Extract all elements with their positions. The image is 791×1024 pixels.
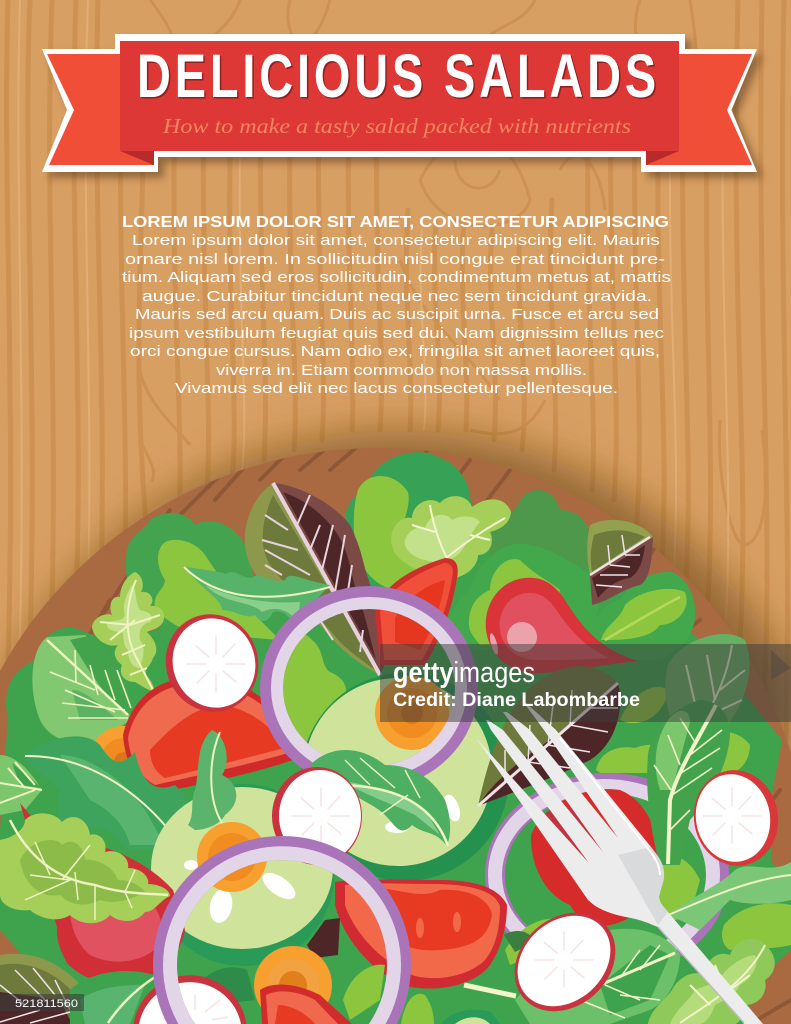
body copy bbox=[122, 214, 671, 397]
purple leaf: bottom left bbox=[0, 954, 90, 1024]
lettuce: small light leaf inside ring bbox=[660, 856, 700, 925]
cucumber: center bbox=[301, 673, 509, 881]
radish slice: right bbox=[686, 763, 786, 873]
ribbon shadow bbox=[48, 40, 763, 178]
lettuce: bottom center bbox=[401, 994, 500, 1024]
lettuce: left edge leaf bbox=[0, 755, 42, 815]
arugula: bottom left bbox=[70, 971, 155, 1024]
lettuce: frilly top bbox=[391, 496, 511, 578]
lettuce: right tall leaf bbox=[647, 700, 730, 865]
tomato: under fork bbox=[531, 789, 657, 926]
watermark credit: Credit: Diane Labombarbe bbox=[393, 690, 640, 711]
arugula: large lower left bbox=[23, 736, 192, 862]
watermark band bbox=[380, 644, 791, 722]
body paragraph: tium. Aliquam sed eros sollicitudin, condimentum metus at, mattis bbox=[122, 270, 671, 286]
tomato: bottom bbox=[260, 985, 352, 1024]
ribbon tails bbox=[47, 54, 752, 165]
lettuce: light lobes right bbox=[596, 687, 750, 773]
lettuce: top center bbox=[345, 452, 473, 600]
radish slice: lower right bbox=[495, 892, 635, 1024]
arugula: small upright bbox=[188, 730, 236, 830]
oak leaf: lower left bbox=[0, 813, 170, 923]
tomato: lower left bbox=[20, 803, 185, 985]
body paragraph: ipsum vestibulum feugiat quis sed dui. Nam dignissim tellus nec bbox=[129, 326, 664, 342]
purple leaf: top bbox=[245, 483, 387, 675]
tomato: top center bbox=[375, 558, 458, 665]
title ribbon bbox=[42, 34, 763, 178]
watermark logo text: gettyimages bbox=[393, 657, 535, 689]
ribbon white outline bbox=[42, 34, 757, 172]
body paragraph: orci congue cursus. Nam odio ex, fringilla sit amet laoreet quis, bbox=[130, 344, 660, 360]
arugula: on cucumber bbox=[310, 750, 450, 846]
body paragraph bbox=[122, 233, 671, 397]
onion ring: lower right bbox=[495, 783, 719, 967]
cucumber: lower left bbox=[151, 784, 334, 966]
lettuce: back left bbox=[126, 513, 280, 650]
beet wedge bbox=[486, 578, 638, 673]
salad bbox=[0, 452, 791, 1024]
image id tag bbox=[0, 994, 84, 1011]
lettuce: right bbox=[590, 572, 695, 660]
radish slice: bottom left bbox=[134, 975, 246, 1024]
tomato: left bbox=[123, 680, 306, 793]
onion ring: top bbox=[272, 598, 466, 778]
lettuce: bottom wide leaf bbox=[464, 919, 680, 1024]
subtitle: How to make a tasty salad packed with nutrients bbox=[162, 114, 631, 138]
radish slice: center bbox=[272, 767, 362, 865]
lettuce: light lobe inside ring bbox=[274, 634, 346, 760]
lettuce: bottom right frilly bbox=[648, 938, 775, 1024]
ribbon main band bbox=[120, 41, 679, 151]
lettuce base layer bbox=[0, 500, 791, 1024]
body paragraph: augue. Curabitur tincidunt neque nec sem tincidunt gravida. bbox=[142, 289, 652, 305]
fork bbox=[476, 703, 763, 1024]
body paragraph: ornare nisl lorem. In sollicitudin nisl congue erat tincidunt pre- bbox=[125, 252, 665, 268]
ribbon folds bbox=[120, 151, 679, 165]
arugula: right lower bbox=[668, 862, 791, 950]
lettuce: center right bbox=[447, 544, 598, 650]
tomato: wedge bottom center bbox=[335, 880, 507, 989]
purple leaf: center bbox=[478, 666, 620, 806]
onion ring: bottom left bbox=[153, 836, 411, 1024]
body paragraph: Vivamus sed elit nec lacus consectetur pellentesque. bbox=[175, 381, 618, 397]
lettuce: big left leaf bbox=[6, 627, 135, 758]
wooden plate bbox=[0, 440, 791, 1024]
oak leaf bbox=[92, 572, 164, 692]
arugula: top bbox=[183, 566, 330, 628]
dark leaf bits: under ring bbox=[197, 918, 385, 1020]
body paragraph: Mauris sed arcu quam. Duis ac suscipit urna. Fusce et arcu sed bbox=[135, 307, 659, 323]
body heading: LOREM IPSUM DOLOR SIT AMET, CONSECTETUR ADIPISCING bbox=[122, 214, 669, 231]
watermark triangle bbox=[771, 650, 791, 680]
carrot: left (behind leaf) bbox=[88, 726, 160, 798]
plate drop shadow bbox=[0, 432, 791, 1024]
body paragraph: Lorem ipsum dolor sit amet, consectetur adipiscing elit. Mauris bbox=[132, 233, 660, 249]
carrot: center bbox=[375, 676, 449, 750]
carrot: bottom bbox=[254, 946, 332, 1024]
carrot: on cucumber bbox=[197, 822, 267, 892]
lettuce: right top leaf bbox=[665, 634, 750, 750]
radish slice: top left bbox=[153, 602, 271, 724]
lettuce: muted green back bbox=[490, 490, 590, 575]
body paragraph: viverra in. Etiam commodo non massa mollis. bbox=[216, 363, 587, 379]
image id tag: 521811560 bbox=[15, 998, 78, 1010]
purple leaf: small right bbox=[587, 520, 653, 605]
